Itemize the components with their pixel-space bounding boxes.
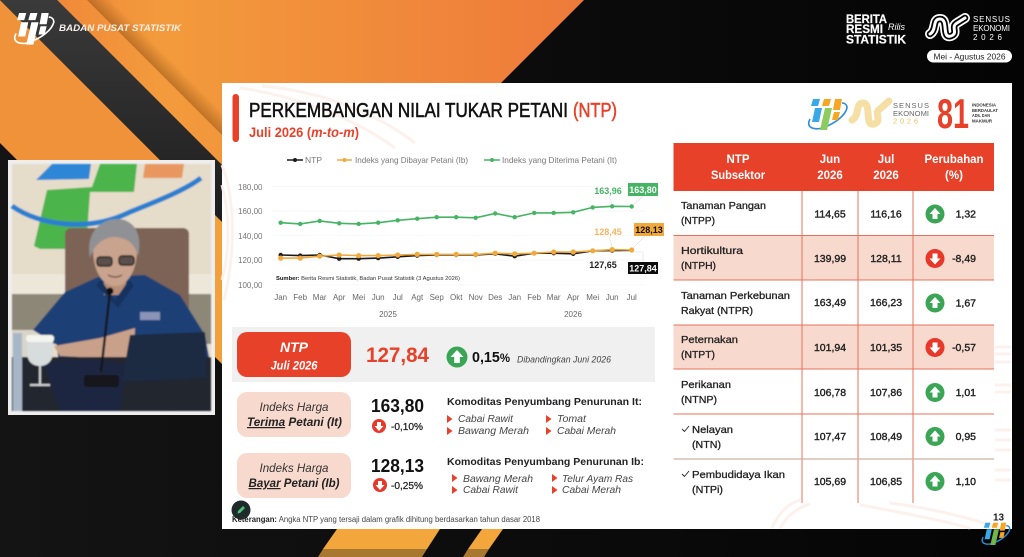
header logos: Berita Resmi Statistik and Sensus Ekonomi <box>846 12 1012 62</box>
heading: PERKEMBANGAN NILAI TUKAR PETANI <box>249 99 568 122</box>
It commodities: Tomat <box>557 413 587 425</box>
Sensus Ekonomi wordmark: SENSUS <box>973 15 1010 24</box>
y axis labels: 100,00 <box>238 281 263 290</box>
anniversary slogan <box>972 102 998 124</box>
row: Tanaman Pangan: (NTPP) <box>681 215 715 227</box>
presenter video frame <box>8 160 215 415</box>
x axis months: Okt <box>450 293 463 302</box>
row: Pembudidaya Ikan: (NTPi) <box>692 484 723 496</box>
row: Hortikultura: 139,99 <box>814 253 846 265</box>
Ib commodities <box>447 456 644 496</box>
x axis months: Jun <box>606 293 619 302</box>
x axis months: Des <box>488 293 502 302</box>
row: Tanaman Perkebunan Rakyat <box>681 290 976 317</box>
Ib index row <box>237 453 644 498</box>
icon: down arrow <box>372 419 386 433</box>
anniversary slogan: BERDAULAT <box>972 108 998 113</box>
legend: NTP <box>305 155 322 165</box>
Berita Resmi Statistik wordmark: RESMI <box>846 22 883 36</box>
row: Tanaman Pangan: Tanaman Pangan <box>681 200 766 212</box>
row: Peternakan: (NTPT) <box>681 349 715 361</box>
series: It <box>281 206 632 224</box>
It change: -0,10% <box>391 422 423 433</box>
row: Tanaman Perkebunan Rakyat: 166,23 <box>870 297 902 309</box>
row: Peternakan: 101,94 <box>814 342 846 354</box>
Berita Resmi Statistik wordmark: STATISTIK <box>846 32 906 46</box>
presenter photo <box>12 164 211 411</box>
row: Perikanan: Perikanan <box>681 379 731 391</box>
icon: 81 anniversary mark: 81 <box>937 90 969 137</box>
data labels: 127,84 <box>629 264 657 274</box>
date pill: Mei - Agustus 2026 <box>934 52 1006 62</box>
line chart <box>238 155 664 319</box>
row: Tanaman Pangan <box>681 200 976 227</box>
row: Hortikultura <box>681 245 976 272</box>
x axis months: Jan <box>274 293 287 302</box>
data labels: 128,45 <box>594 227 622 237</box>
row: Tanaman Pangan: 1,32 <box>956 208 976 220</box>
Sensus Ekonomi text <box>893 101 929 126</box>
icon: pencil button <box>232 500 250 520</box>
Sensus Ekonomi wordmark: EKONOMI <box>973 24 1010 33</box>
data labels: 163,96 <box>594 186 622 196</box>
row: Perikanan <box>681 379 976 406</box>
Ib badge <box>237 453 351 498</box>
x axis months: Apr <box>333 293 346 302</box>
icon: BPS logo colour <box>809 99 847 130</box>
x axis months: Feb <box>527 293 542 302</box>
table header: Perubahan <box>924 154 984 166</box>
row: Nelayan: Nelayan <box>692 424 733 436</box>
NTP badge: Juli 2026 <box>270 358 318 372</box>
x axis months: Nov <box>469 293 483 302</box>
table header: 2026 <box>873 170 899 182</box>
Sensus Ekonomi text: EKONOMI <box>893 109 929 118</box>
x axis months: Agt <box>411 293 424 302</box>
legend <box>287 155 617 165</box>
It commodities: Bawang Merah <box>458 425 529 437</box>
subtitle: Juli 2026 (m-to-m) <box>249 125 359 140</box>
row: Nelayan: 107,47 <box>814 431 846 443</box>
icon: Sensus Ekonomi squiggle white <box>930 18 965 36</box>
x axis months: 2026 <box>564 310 582 319</box>
row: Pembudidaya Ikan: 1,10 <box>956 476 976 488</box>
It commodities: Cabai Rawit <box>458 413 514 425</box>
change value: 0,15% <box>472 349 510 366</box>
legend: Indeks yang Dibayar Petani (Ib) <box>355 155 468 165</box>
Ib change: -0,25% <box>391 481 423 492</box>
row: Nelayan <box>682 424 976 451</box>
series: Ib <box>281 250 632 258</box>
Ib commodities: Cabai Merah <box>562 484 621 496</box>
x axis months: Mar <box>313 293 327 302</box>
x axis months: Mar <box>547 293 561 302</box>
row: Nelayan: 0,95 <box>956 431 976 443</box>
data labels <box>589 183 664 274</box>
row: Pembudidaya Ikan <box>682 469 976 496</box>
icon: down arrow <box>373 478 387 492</box>
decorative watermark <box>222 86 1011 528</box>
legend: Indeks yang Diterima Petani (It) <box>502 155 617 165</box>
row: Perikanan: 107,86 <box>870 387 902 399</box>
row: Pembudidaya Ikan: 105,69 <box>814 476 846 488</box>
subsector table <box>674 143 994 503</box>
table header: NTP <box>726 154 750 166</box>
x axis months: Mei <box>352 293 365 302</box>
footnote: Keterangan: Angka NTP yang tersaji dalam grafik dihitung berdasarkan tahun dasar 2018 <box>232 515 541 524</box>
row: Pembudidaya Ikan: 106,85 <box>870 476 902 488</box>
Ib commodities: Telur Ayam Ras <box>562 473 634 485</box>
It value: 163,80 <box>371 396 424 416</box>
y axis labels: 180,00 <box>238 183 263 192</box>
x axis months: Apr <box>567 293 580 302</box>
NTP badge: NTP <box>280 339 309 355</box>
x axis months: Sep <box>430 293 444 302</box>
heading accent: (NTP) <box>573 99 617 122</box>
row: Tanaman Perkebunan Rakyat: 163,49 <box>814 297 846 309</box>
comparison note: Dibandingkan Juni 2026 <box>517 354 612 366</box>
x axis months: Mei <box>586 293 599 302</box>
It commodities: Cabai Merah <box>557 425 616 437</box>
icon: Sensus Ekonomi squiggle <box>852 101 889 124</box>
x axis months: Jun <box>372 293 385 302</box>
panel logos <box>809 90 998 137</box>
row: Nelayan: 108,49 <box>870 431 902 443</box>
main slide panel <box>222 83 1012 529</box>
row: Tanaman Perkebunan Rakyat: Rakyat (NTPR) <box>681 305 753 317</box>
organisation name: BADAN PUSAT STATISTIK <box>59 23 182 34</box>
Berita Resmi Statistik wordmark <box>846 12 906 46</box>
row: Hortikultura: -8,49 <box>952 253 976 265</box>
Sensus Ekonomi text: SENSUS <box>893 101 929 110</box>
Sensus Ekonomi text: 2026 <box>893 116 918 126</box>
Ib commodities: Bawang Merah <box>463 473 533 485</box>
anniversary slogan: INDONESIA <box>972 102 997 108</box>
data labels: 127,65 <box>589 260 617 270</box>
y axis labels <box>238 183 263 290</box>
It commodities <box>447 396 642 437</box>
row: Hortikultura: 128,11 <box>870 253 902 265</box>
Ib commodities: Cabai Rawit <box>463 484 519 496</box>
row: Peternakan: Peternakan <box>681 334 738 346</box>
icon: BPS logo white <box>15 13 54 45</box>
y axis labels: 120,00 <box>238 256 263 265</box>
It index row <box>237 392 642 437</box>
page number: 13 <box>993 512 1004 524</box>
table header: Jul <box>878 154 894 166</box>
icon: up arrow <box>446 346 468 368</box>
x axis months: Jan <box>508 293 521 302</box>
x axis months: 2025 <box>379 310 397 319</box>
row: Peternakan: 101,35 <box>870 342 902 354</box>
table header <box>674 143 994 191</box>
x axis months <box>274 293 637 319</box>
row: Perikanan: 1,01 <box>956 387 976 399</box>
It badge: Indeks Harga <box>260 400 329 414</box>
row: Tanaman Perkebunan Rakyat: 1,67 <box>956 298 976 310</box>
row: Peternakan <box>681 334 976 361</box>
Berita Resmi Statistik wordmark: BERITA <box>846 12 887 26</box>
row: Nelayan: (NTN) <box>692 439 721 451</box>
row: Tanaman Perkebunan Rakyat: Tanaman Perkebunan <box>681 290 790 302</box>
Berita Resmi Statistik wordmark: Rilis <box>888 22 905 32</box>
Ib commodities: Komoditas Penyumbang Penurunan Ib: <box>447 456 644 468</box>
y axis labels: 140,00 <box>238 232 263 241</box>
x axis months: Jul <box>393 293 403 302</box>
title <box>232 94 617 142</box>
row: Perikanan: (NTNP) <box>681 394 717 406</box>
x axis months: Jul <box>627 293 637 302</box>
Sensus Ekonomi wordmark: 2026 <box>973 33 1003 42</box>
table header: Subsektor <box>711 170 765 182</box>
Ib value: 128,13 <box>371 456 424 476</box>
Sensus Ekonomi wordmark <box>973 15 1010 42</box>
NTP summary band <box>232 327 655 382</box>
date pill <box>927 50 1012 62</box>
Ib badge: Bayar Petani (Ib) <box>248 476 340 490</box>
NTP value: 127,84 <box>366 344 429 367</box>
anniversary slogan: MAKMUR <box>972 118 993 124</box>
data labels: 163,80 <box>629 185 657 195</box>
table header: (%) <box>945 170 963 182</box>
source note: Sumber: Berita Resmi Statistik, Badan Pusat Statistik (3 Agustus 2026) <box>276 276 460 282</box>
row: Pembudidaya Ikan: Pembudidaya Ikan <box>692 469 785 481</box>
row: Perikanan: 106,78 <box>814 387 846 399</box>
data labels: 128,13 <box>635 225 663 235</box>
row: Peternakan: -0,57 <box>952 342 976 354</box>
y axis labels: 160,00 <box>238 207 263 216</box>
row: Hortikultura: (NTPH) <box>681 260 716 272</box>
It commodities: Komoditas Penyumbang Penurunan It: <box>447 396 642 408</box>
header logo: Badan Pusat Statistik <box>15 13 182 45</box>
table header: Jun <box>820 154 840 166</box>
row: Hortikultura: Hortikultura <box>681 245 743 257</box>
It badge <box>237 392 351 437</box>
row: Tanaman Pangan: 114,65 <box>814 208 846 220</box>
anniversary slogan: ADIL DAN <box>972 113 991 118</box>
table header: 2026 <box>817 170 843 182</box>
icon: small BPS logo <box>982 523 1010 545</box>
Ib badge: Indeks Harga <box>260 461 329 475</box>
series: NTP <box>281 250 632 259</box>
NTP badge <box>237 332 351 377</box>
row: Tanaman Pangan: 116,16 <box>870 208 902 220</box>
It badge: Terima Petani (It) <box>247 415 342 429</box>
x axis months: Feb <box>293 293 308 302</box>
